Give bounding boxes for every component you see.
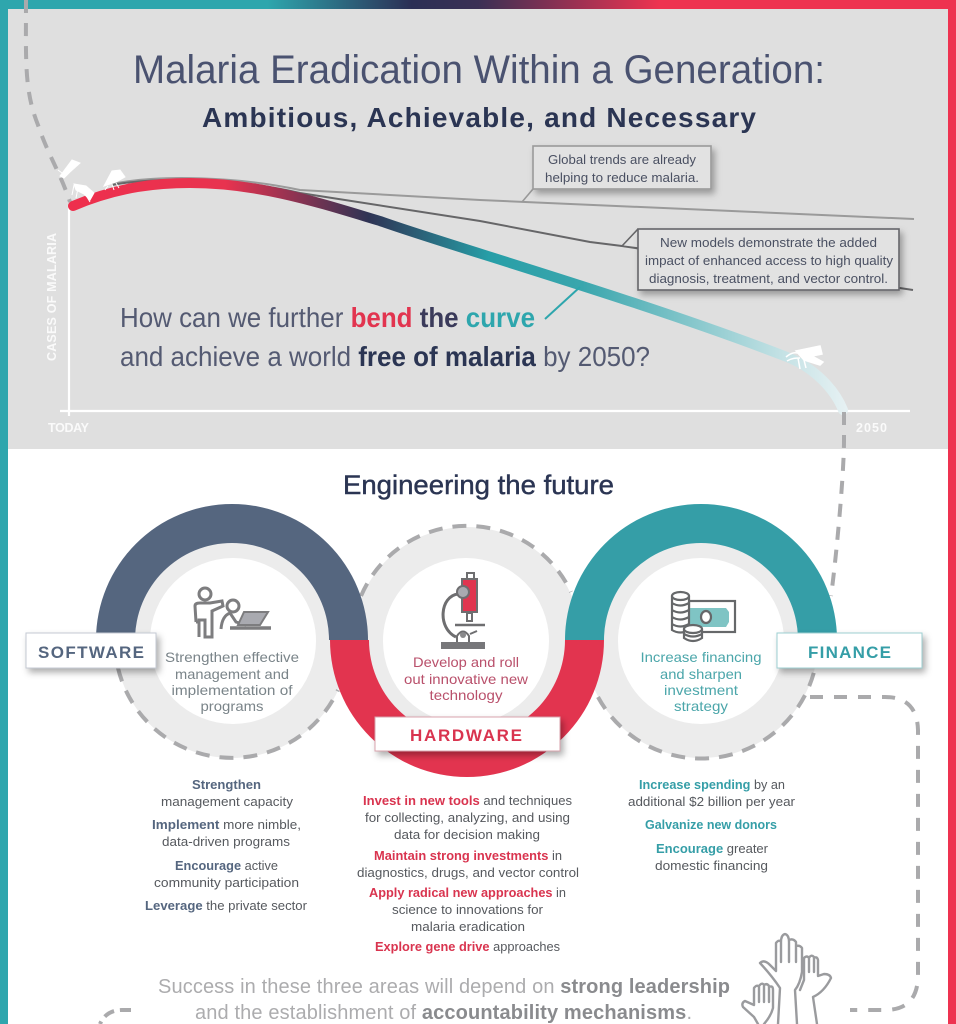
callout: global trends [522,146,711,202]
text: software summary: Strengthen effective [165,649,299,665]
list: hardware actions: science to innovations for [392,902,544,917]
list: finance actions: Encourage greater [656,841,769,856]
panel: software circle [115,524,349,758]
trend line: global trends [112,178,914,219]
teal leader line [545,287,580,319]
list: software actions: Strengthen [192,777,261,792]
list: software actions [145,777,308,913]
axis label: today: TODAY [48,421,90,435]
list: software actions: community participation [154,875,299,890]
text: hardware summary: technology [430,687,502,703]
list: hardware actions: Invest in new tools and techniques [363,793,572,808]
closing statement [158,976,730,1024]
label: finance: FINANCE [808,643,891,662]
axis label: cases of malaria: CASES OF MALARIA [45,233,59,361]
list: hardware actions [357,793,579,954]
label: hardware [375,717,560,751]
list: finance actions: Increase spending by an [639,777,785,792]
question text: and achieve a world free of malaria by 2050? [120,341,650,372]
ring: software navy [96,504,368,640]
text: software summary: programs [200,698,264,714]
list: hardware actions: Explore gene drive approaches [375,939,560,954]
panel: finance circle [584,524,818,759]
callout: new models [622,229,899,290]
ring: hardware red [330,640,604,777]
icon: coins and banknote [672,592,735,641]
dashed path: 2050 to finance [831,412,844,596]
label: software: SOFTWARE [38,643,144,662]
list: hardware actions: for collecting, analyzing, and using [365,810,570,825]
label: hardware: HARDWARE [410,726,522,745]
dashed path: finance to bottom right [810,697,918,1010]
callout: global trends: Global trends are already [548,152,696,167]
white centre: software [150,558,316,724]
text: hardware summary [404,654,529,703]
dashed path: from top left to curve start [26,0,70,202]
list: hardware actions: data for decision making [394,827,540,842]
icon: raised hands [742,934,831,1024]
icon: mosquito group at start [58,160,125,202]
text: finance summary: and sharpen [660,666,742,682]
ring: finance teal [565,504,837,640]
text: finance summary: strategy [674,698,728,714]
title: Malaria Eradication Within a Generation: [133,48,825,92]
list: software actions: data-driven programs [162,834,291,849]
text: software summary [165,649,299,714]
text: finance summary [640,649,762,714]
list: finance actions: domestic financing [655,858,768,873]
label: software [26,633,156,668]
text: software summary: management and [175,666,289,682]
callout: new models: New models demonstrate the added [660,235,877,250]
icon: person with laptop [195,588,271,637]
list: finance actions [628,777,796,873]
title [133,48,825,133]
list: software actions: Encourage active [175,858,278,873]
panel: hardware circle [330,526,604,777]
text: finance summary: Increase financing [640,649,762,665]
list: finance actions: Galvanize new donors [645,817,777,832]
text: finance summary: investment [664,682,738,698]
text: software summary: implementation of [172,682,293,698]
question text: How can we further bend the curve [120,302,535,333]
callout: new models: impact of enhanced access to high quality [645,253,894,268]
title: Ambitious, Achievable, and Necessary [202,102,756,133]
list: hardware actions: diagnostics, drugs, and vector control [357,865,579,880]
list: hardware actions: Maintain strong investments in [374,848,562,863]
list: finance actions: additional $2 billion per year [628,794,796,809]
trend line: new models [112,180,913,290]
icon: mosquito at 2050 [786,346,823,369]
question text [120,302,650,372]
panel: top chart background [8,9,948,449]
white centre: finance [618,558,784,724]
text: hardware summary: out innovative new [404,671,529,687]
list: software actions: management capacity [161,794,294,809]
closing statement: Success in these three areas will depend on strong leadership [158,976,730,998]
list: software actions: Implement more nimble, [152,817,301,832]
axis label: 2050: 2050 [856,421,887,435]
text: hardware summary: Develop and roll [413,654,519,670]
icon: microscope [441,573,485,649]
heading: engineering the future: Engineering the future [343,470,614,500]
label: finance [777,633,922,668]
main curve: bend the curve [73,183,843,410]
callout: new models: diagnosis, treatment, and vector control. [649,271,888,286]
dashed path: bottom left [100,1010,131,1024]
list: software actions: Leverage the private sector [145,898,308,913]
chart axes [60,205,910,416]
list: hardware actions: Apply radical new approaches in [369,885,566,900]
list: hardware actions: malaria eradication [411,919,525,934]
callout: global trends: helping to reduce malaria. [545,170,699,185]
closing statement: and the establishment of accountability mechanisms. [195,1002,692,1024]
